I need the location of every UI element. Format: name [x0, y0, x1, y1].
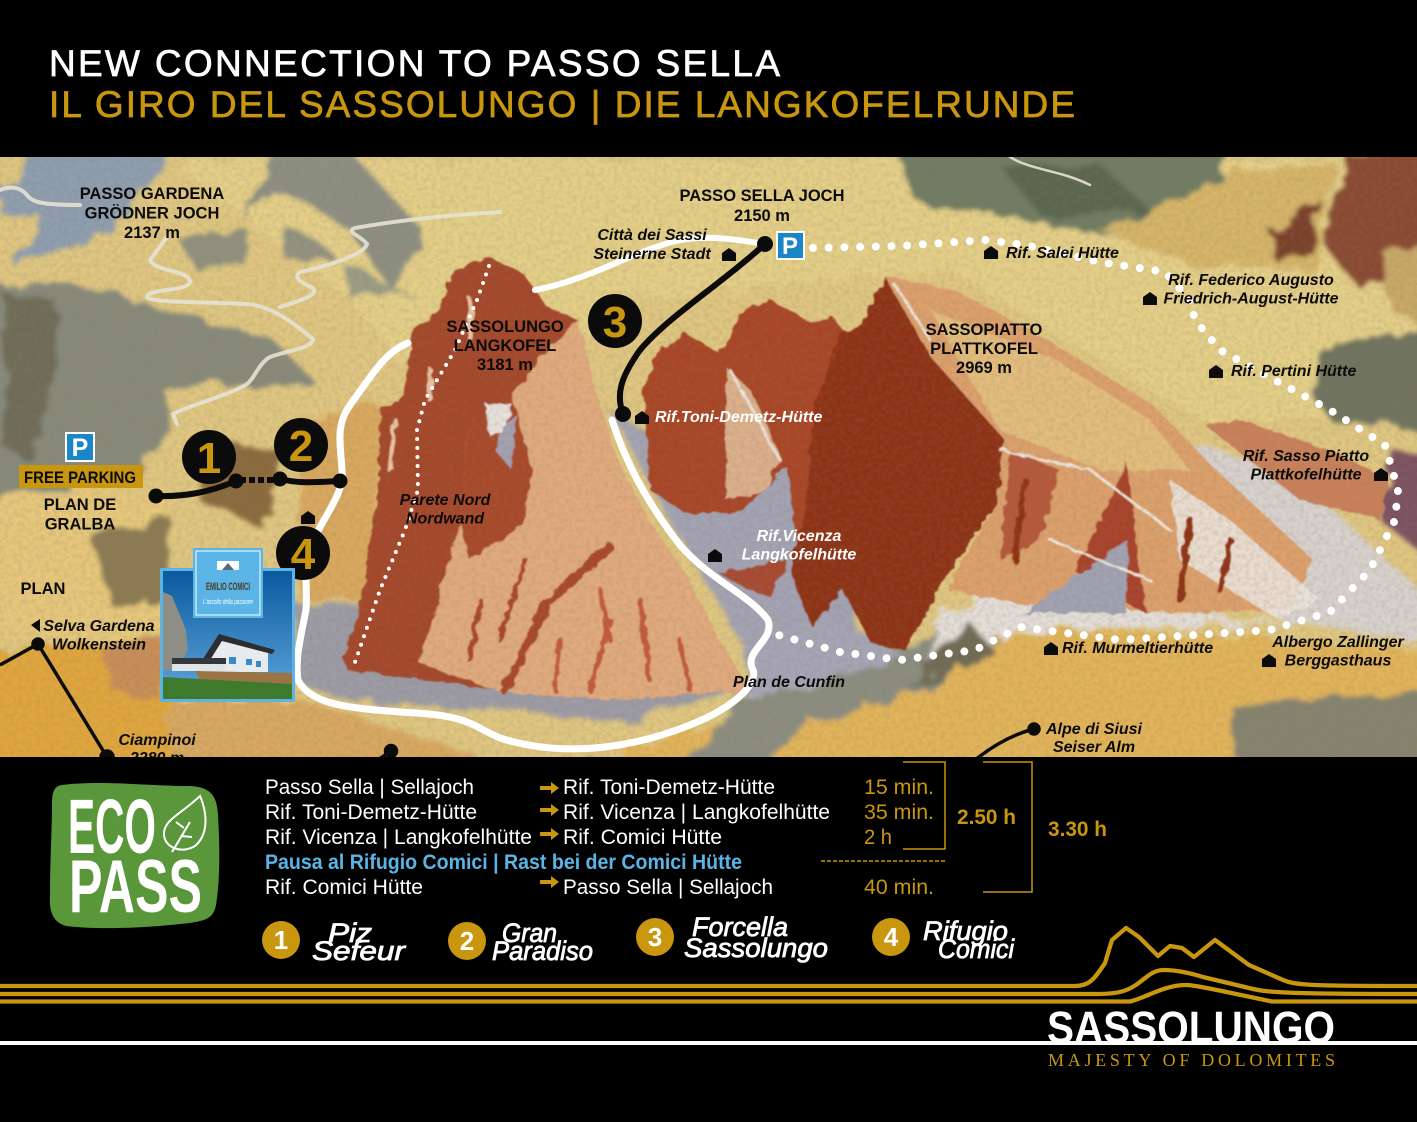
Sassolungo wordmark — [1047, 1002, 1335, 1070]
legend 3: Forcella Sassolungo: 3 — [648, 922, 662, 952]
panorama map — [0, 140, 1417, 770]
grain overlay — [0, 157, 1417, 757]
marker 2 — [274, 418, 328, 472]
mountains — [343, 257, 1390, 700]
parking sign left — [66, 433, 94, 462]
marker 4 — [276, 526, 330, 580]
legend 1: Piz Sefeur — [262, 918, 406, 966]
label: Parete Nord: Nordwand — [406, 510, 485, 528]
route 3 black — [615, 236, 773, 422]
lift lines — [0, 639, 1039, 763]
label: Ciampinoi: Ciampinoi — [118, 732, 196, 749]
panel: route info band — [0, 757, 1417, 1122]
itinerary table: Pausa al Rifugio Comici | Rast bei der Comici Hütte — [265, 851, 742, 874]
itinerary table: Rif. Toni-Demetz-Hütte — [265, 801, 477, 824]
label: Rif. Toni-Demetz: Rif.Toni-Demetz-Hütte — [655, 409, 822, 426]
label: Rif. Federico Augusto: Rif. Federico Augusto — [1168, 272, 1334, 289]
label: Passo Gardena: GRÖDNER JOCH — [85, 204, 219, 222]
routes 1 and 2 black — [148, 472, 348, 504]
parking sign left: P — [72, 434, 88, 462]
label: Passo Gardena: PASSO GARDENA — [80, 185, 224, 203]
label: Passo Gardena: 2137 m — [124, 224, 180, 242]
title: IL GIRO DEL SASSOLUNGO | DIE LANGKOFELRUNDE — [49, 84, 1075, 125]
white route: upper segment — [535, 238, 765, 290]
label: Sassopiatto: 2969 m — [956, 359, 1012, 377]
label: Alpe di Siusi: Alpe di Siusi — [1046, 721, 1142, 738]
legend 4: Rifugio Comici — [872, 916, 1015, 964]
legend 4: Rifugio Comici: Rifugio — [923, 916, 1008, 946]
marker 3 — [588, 294, 642, 348]
label: Rif. Murmeltier: Rif. Murmeltierhütte — [1062, 640, 1213, 657]
label: Alpe di Siusi: Seiser Alm — [1053, 739, 1135, 756]
label: Sassopiatto: SASSOPIATTO — [926, 321, 1042, 339]
label: Parete Nord: Parete Nord — [400, 492, 490, 509]
marker 3: 3 — [603, 298, 627, 347]
title: NEW CONNECTION TO PASSO SELLA — [49, 43, 780, 84]
durations: 35 min. — [864, 801, 934, 824]
white dotted route: Passo Sella to Plan de Cunfin — [778, 240, 1398, 660]
legend 1: Piz Sefeur: Sefeur — [312, 936, 406, 966]
label: Passo Sella: 2150 m — [734, 207, 790, 225]
label: Sassolungo: 3181 m — [477, 356, 533, 374]
Sassolungo wordmark: SASSOLUNGO — [1047, 1002, 1335, 1053]
white route — [297, 343, 769, 749]
free parking label: FREE PARKING — [24, 469, 136, 487]
terrain — [0, 140, 1417, 770]
Eco Pass logo: PASS — [69, 844, 202, 928]
arrows — [540, 782, 559, 888]
photo: Rifugio Comici: EMILIO COMICI — [206, 581, 250, 593]
photo: Rifugio Comici — [160, 548, 295, 702]
legend 3: Forcella Sassolungo: Sassolungo — [684, 933, 828, 963]
dashed separator — [821, 860, 946, 862]
marker 4: 4 — [291, 530, 316, 579]
durations: 15 min. — [864, 776, 934, 799]
label: Sassolungo: SASSOLUNGO — [446, 318, 564, 336]
itinerary table: Rif. Toni-Demetz-Hütte — [563, 776, 775, 799]
itinerary table: Rif. Comici Hütte — [563, 826, 722, 849]
legend 2: Gran Paradiso: 2 — [460, 926, 474, 956]
label: Citta dei Sassi: Steinerne Stadt — [593, 246, 711, 263]
durations: 2 h — [864, 826, 892, 849]
itinerary table: Passo Sella | Sellajoch — [265, 776, 474, 799]
Sassolungo wordmark: MAJESTY OF DOLOMITES — [1048, 1050, 1335, 1070]
label: Rif. Sasso Piatto: Plattkofelhütte — [1250, 466, 1362, 484]
parking sign Passo Sella: P — [782, 233, 798, 260]
title — [49, 43, 1075, 125]
label: Albergo Zallinger: Albergo Zallinger — [1272, 634, 1404, 651]
label: Ciampinoi: 2280 m — [129, 750, 184, 767]
label: Rif. Federico Augusto: Friedrich-August-Hütte — [1163, 290, 1339, 308]
itinerary table: Rif. Vicenza | Langkofelhütte — [265, 826, 532, 849]
Sassolungo logo lines — [0, 928, 1417, 1002]
label: Rif. Vicenza: Langkofelhütte — [742, 546, 856, 564]
rock streaks — [390, 285, 1230, 690]
legend 2: Gran Paradiso: Gran — [502, 918, 557, 948]
photo: Rifugio Comici: L'ascolto della passione — [203, 599, 253, 606]
durations — [864, 776, 934, 899]
marker 2: 2 — [289, 422, 313, 471]
label: Albergo Zallinger: Berggasthaus — [1285, 652, 1391, 670]
bracket: 3.30 h: 3.30 h — [1048, 818, 1107, 841]
legend 4: Rifugio Comici: 4 — [884, 922, 899, 952]
durations: 40 min. — [864, 876, 934, 899]
label: Selva Gardena: Selva Gardena — [43, 618, 155, 635]
bracket: 2.50 h — [903, 762, 1016, 849]
itinerary table: Rif. Comici Hütte — [265, 876, 423, 899]
legend 3: Forcella Sassolungo — [636, 912, 828, 963]
legend 2: Gran Paradiso — [448, 918, 593, 966]
scree and snowfields — [295, 410, 1417, 722]
bracket: 3.30 h — [983, 762, 1107, 892]
itinerary table — [265, 776, 830, 899]
parking sign Passo Sella — [777, 232, 804, 260]
label: Plan de Cunfin: Plan de Cunfin — [733, 674, 845, 691]
itinerary table: Rif. Vicenza | Langkofelhütte — [563, 801, 830, 824]
Eco Pass logo: ECO — [68, 784, 156, 870]
legend 4: Rifugio Comici: Comici — [938, 934, 1015, 964]
label: Plan: PLAN — [21, 580, 65, 598]
label: Rif. Vicenza: Rif.Vicenza — [757, 528, 841, 545]
label: Selva Gardena — [31, 618, 155, 654]
legend 1: Piz Sefeur: Piz — [328, 918, 373, 948]
marker 1: 1 — [197, 434, 221, 483]
roads — [0, 157, 1090, 424]
bracket: 2.50 h: 2.50 h — [957, 806, 1016, 829]
legend 1: Piz Sefeur: 1 — [274, 925, 288, 955]
Eco Pass logo — [50, 783, 219, 928]
label: Sassopiatto: PLATTKOFEL — [930, 340, 1038, 358]
label: Plan de Gralba: GRALBA — [45, 516, 115, 534]
map hut icons — [301, 246, 1388, 667]
label: Rif. Pertini: Rif. Pertini Hütte — [1231, 363, 1356, 380]
legend 2: Gran Paradiso: Paradiso — [492, 936, 593, 966]
label: Selva Gardena: Wolkenstein — [52, 636, 146, 654]
label: Rif. Sasso Piatto: Rif. Sasso Piatto — [1243, 448, 1369, 465]
white dotted route: north face — [354, 266, 489, 665]
label: Rif. Salei: Rif. Salei Hütte — [1006, 245, 1119, 262]
label: Sassolungo: LANGKOFEL — [454, 337, 556, 355]
itinerary table: Passo Sella | Sellajoch — [563, 876, 773, 899]
white baseline — [0, 1041, 1417, 1045]
label: Citta dei Sassi: Città dei Sassi — [597, 227, 707, 244]
marker 1 — [182, 430, 236, 484]
legend 3: Forcella Sassolungo: Forcella — [692, 912, 788, 942]
label: Passo Sella: PASSO SELLA JOCH — [679, 187, 845, 205]
label: Plan de Gralba: PLAN DE — [44, 496, 116, 514]
